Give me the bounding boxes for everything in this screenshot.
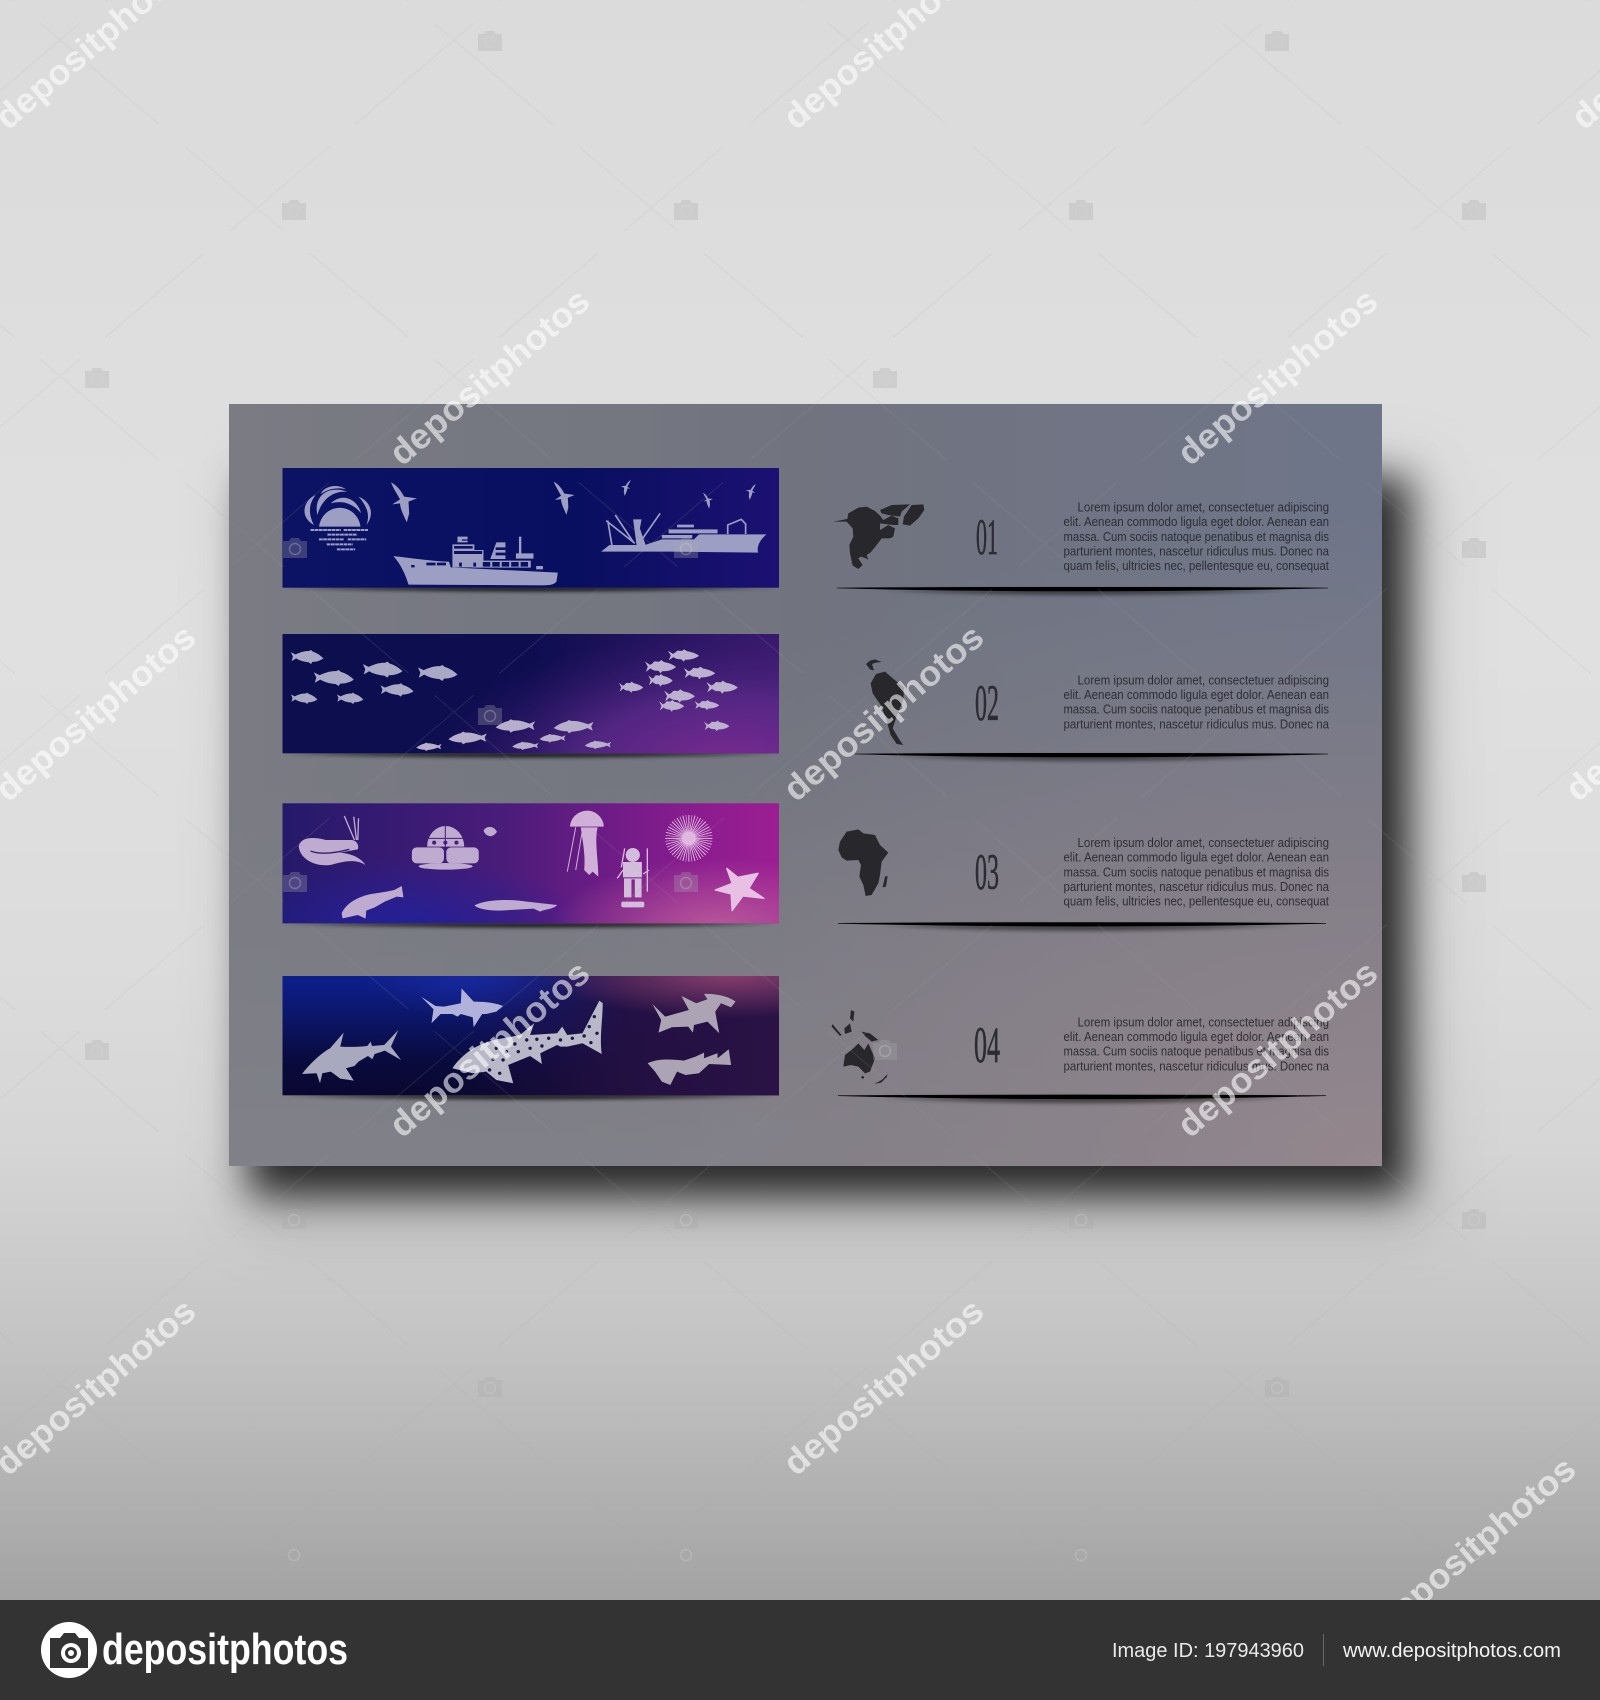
- watermark text: depositphotos: [776, 617, 991, 809]
- watermark text: depositphotos: [1170, 953, 1385, 1145]
- footer logo wordmark: depositphotos: [102, 1625, 348, 1674]
- panel: banner 1 surface scene: [282, 468, 779, 591]
- panel: banner 4 sharks: [282, 976, 779, 1099]
- row 2: map, number, text, divider: [855, 659, 1330, 761]
- icon: South America map: [866, 659, 904, 745]
- icon: North America map: [833, 504, 924, 569]
- watermark text: depositphotos: [1368, 1449, 1583, 1641]
- panel: main card: [229, 404, 1382, 1166]
- footer website: www.depositphotos.com: [1342, 1640, 1561, 1662]
- icon: grouper: [342, 886, 403, 919]
- icon: whale shark: [452, 1001, 603, 1083]
- text block 3: quam felis, ultricies nec, pellentesque eu, consequat: [1064, 894, 1329, 909]
- icon: Oceania map: [832, 1010, 888, 1084]
- icon: cargo ship: [393, 537, 558, 585]
- icon: deep sea diver: [617, 848, 649, 907]
- icon: lamprey: [474, 900, 557, 912]
- text block 3: parturient montes, nascetur ridiculus mus. Donec na: [1064, 879, 1330, 894]
- row 1: map, number, text, divider: 01: [976, 510, 998, 566]
- text block 4: parturient montes, nascetur ridiculus mus. Donec na: [1064, 1058, 1330, 1073]
- text block 1: elit. Aenean commodo ligula eget dolor. Aenean ean: [1064, 514, 1329, 529]
- row 3: map, number, text, divider: 03: [975, 845, 999, 901]
- text block 2: [1064, 672, 1330, 731]
- icon: small fish: [483, 827, 497, 836]
- icon: Africa map: [838, 829, 888, 896]
- panel drop shadow: [245, 470, 1430, 1225]
- text block 2: parturient montes, nascetur ridiculus mus. Donec na: [1064, 716, 1330, 731]
- text block 1: parturient montes, nascetur ridiculus mus. Donec na: [1064, 544, 1330, 558]
- number 04: 04: [974, 1018, 1000, 1074]
- watermark text: depositphotos: [1170, 281, 1385, 473]
- row 2: map, number, text, divider: 02: [975, 676, 999, 732]
- icon: wobbegong shark: [648, 1049, 731, 1085]
- icon: small bird: [746, 484, 756, 500]
- icon: small bird: [621, 480, 631, 496]
- icon: sea urchin: [662, 812, 715, 865]
- icon: albatross: [391, 482, 417, 522]
- icon: bull shark: [302, 1030, 401, 1083]
- text block 4: massa. Cum sociis natoque penatibus et magnisa dis: [1064, 1044, 1329, 1059]
- footer bar: [0, 1600, 1600, 1700]
- text block 3: [1064, 835, 1330, 909]
- text block 1: Lorem ipsum dolor amet, consectetuer adipiscing: [1078, 500, 1329, 514]
- text block 2: elit. Aenean commodo ligula eget dolor. Aenean ean: [1064, 687, 1329, 702]
- icon: jellyfish: [567, 811, 604, 877]
- row 3: map, number, text, divider: [838, 829, 1330, 930]
- icon: oarfish: [299, 816, 365, 865]
- icon: hammerhead shark: [652, 994, 735, 1033]
- icon: sun and waves: [304, 486, 371, 549]
- icon: albatross: [554, 482, 575, 515]
- text block 3: massa. Cum sociis natoque penatibus et magnisa dis: [1064, 864, 1329, 879]
- image id: Image ID: 197943960: [1112, 1640, 1304, 1662]
- watermark text: depositphotos: [776, 1291, 991, 1483]
- watermark text: depositphotos: [382, 953, 597, 1145]
- watermark camera icons: [85, 31, 1486, 1564]
- text block 1: [1064, 500, 1330, 573]
- panel: banner 3 deep sea: [282, 803, 779, 927]
- text block 3: elit. Aenean commodo ligula eget dolor. Aenean ean: [1064, 850, 1329, 865]
- watermark text: depositphotos: [382, 281, 597, 473]
- icon: great white shark: [421, 988, 503, 1027]
- text block 4: Lorem ipsum dolor amet, consectetuer adipiscing: [1078, 1014, 1329, 1029]
- icon: small bird: [703, 493, 713, 509]
- text block 1: massa. Cum sociis natoque penatibus et magnisa dis: [1064, 529, 1329, 544]
- text block 4: elit. Aenean commodo ligula eget dolor. Aenean ean: [1064, 1029, 1329, 1044]
- icon: trawler ship: [601, 513, 767, 553]
- icon: submersible: [412, 826, 479, 870]
- icon: school of bass: [291, 650, 457, 704]
- icon: school of tuna: [619, 649, 738, 731]
- text block 2: Lorem ipsum dolor amet, consectetuer adipiscing: [1078, 672, 1329, 687]
- panel: banner 2 fish schools: [282, 634, 779, 757]
- text block 1: quam felis, ultricies nec, pellentesque eu, consequat: [1064, 558, 1329, 573]
- icon: school of mackerel: [416, 719, 611, 751]
- icon: depositphotos camera logo: [41, 1622, 97, 1678]
- text block 4: [1064, 1014, 1330, 1073]
- text block 3: Lorem ipsum dolor amet, consectetuer adipiscing: [1078, 835, 1329, 850]
- icon: starfish: [715, 868, 764, 911]
- row 1: map, number, text, divider: [833, 500, 1330, 595]
- text block 2: massa. Cum sociis natoque penatibus et magnisa dis: [1064, 702, 1329, 717]
- row 4: map, number, text, divider: [832, 1010, 1330, 1103]
